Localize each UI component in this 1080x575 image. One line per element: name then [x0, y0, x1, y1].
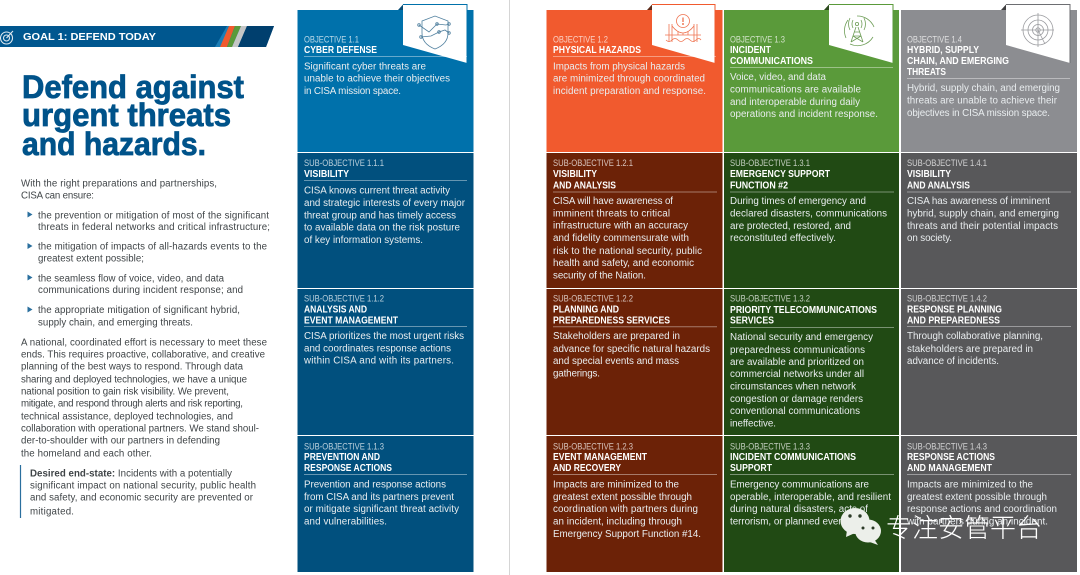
body paragraph: collaboration with operational partners. We stand shoul- — [21, 424, 259, 434]
panel: sub-objective 1.1.3: or mitigate significant threat activity — [304, 504, 459, 515]
panel: sub-objective 1.2.2: gatherings. — [553, 368, 600, 380]
panel: objective 1.4 hybrid threats: Hybrid, supply chain, and emerging — [907, 83, 1060, 94]
panel: objective 1.3 incident communications: operations and incident response. — [730, 109, 878, 120]
panel: sub-objective 1.3.3: operable, interoperable, and resilient — [730, 492, 891, 503]
panel: sub-objective 1.1.1: VISIBILITY — [304, 169, 349, 180]
panel: objective 1.1 cyber defense: OBJECTIVE 1.1 — [304, 34, 359, 44]
panel: sub-objective 1.2.3: EVENT MANAGEMENT — [553, 452, 647, 463]
panel: sub-objective 1.2.3: greatest extent possible through — [553, 492, 692, 503]
bullet list: supply chain, and emerging threats. — [38, 318, 193, 328]
panel: sub-objective 1.2.3: SUB-OBJECTIVE 1.2.3 — [553, 442, 633, 452]
panel: sub-objective 1.4.1: VISIBILITY — [907, 169, 951, 180]
panel: sub-objective 1.2.1: health and safety, and economic — [553, 258, 694, 269]
panel: objective 1.4 hybrid threats — [901, 4, 1077, 152]
panel: sub-objective 1.2.3: Emergency Support Function #14. — [553, 529, 701, 540]
panel: sub-objective 1.4.2: RESPONSE PLANNING — [907, 304, 1002, 316]
panel: sub-objective 1.2.2: and special events and mass — [553, 356, 679, 367]
panel: sub-objective 1.2.3 — [546, 436, 722, 572]
panel: sub-objective 1.2.1 — [546, 153, 722, 288]
bullet list: communications during incident response; and — [38, 285, 243, 296]
panel: sub-objective 1.1.3: Prevention and response actions — [304, 480, 446, 490]
panel: sub-objective 1.4.1: threats and their potential impacts — [907, 221, 1058, 232]
panel: sub-objective 1.4.2 — [901, 289, 1077, 435]
panel: sub-objective 1.2.2 — [546, 289, 722, 435]
panel: sub-objective 1.1.3: and vulnerabilities. — [304, 516, 387, 528]
panel: objective 1.4 hybrid threats: threats are unable to achieve their — [907, 96, 1058, 106]
bullet list: the mitigation of impacts of all-hazards events to the — [38, 242, 267, 252]
panel: sub-objective 1.3.3: terrorism, or planned events. — [730, 516, 854, 528]
body paragraph: der-to-shoulder with our partners in defending — [21, 436, 220, 446]
panel: sub-objective 1.3.2: ineffective. — [730, 418, 776, 430]
panel: objective 1.4 hybrid threats: objectives in CISA mission space. — [907, 108, 1050, 119]
panel: sub-objective 1.3.1 — [724, 153, 899, 288]
panel: sub-objective 1.1.1: and strategic interests of every major — [304, 198, 466, 209]
desired end-state callout: mitigated. — [30, 506, 74, 518]
panel: sub-objective 1.1.3: from CISA and its partners prevent — [304, 492, 454, 503]
panel: sub-objective 1.3.3: during natural disasters, acts of — [730, 504, 868, 515]
body paragraph — [21, 338, 267, 460]
panel: objective 1.2 physical hazards: incident preparation and response. — [553, 86, 706, 97]
panel: objective 1.1 cyber defense: unable to achieve their objectives — [304, 74, 450, 84]
body paragraph: the homeland and each other. — [21, 448, 152, 460]
panel: sub-objective 1.2.1: security of the Nation. — [553, 270, 646, 282]
panel: objective 1.3 incident communications: INCIDENT — [730, 45, 771, 56]
bullet list: the prevention or mitigation of most of the significant — [38, 210, 269, 222]
body paragraph: national position to gain risk visibility. We prevent, — [21, 386, 229, 398]
panel: sub-objective 1.4.1: AND ANALYSIS — [907, 180, 970, 191]
panel: sub-objective 1.3.1: EMERGENCY SUPPORT — [730, 169, 830, 180]
panel: sub-objective 1.1.1 — [298, 153, 474, 288]
panel: objective 1.4 hybrid threats: OBJECTIVE 1.4 — [907, 34, 962, 44]
panel: sub-objective 1.4.3: RESPONSE ACTIONS — [907, 452, 995, 463]
panel: sub-objective 1.2.1: SUB-OBJECTIVE 1.2.1 — [553, 158, 633, 168]
panel: sub-objective 1.4.3: greatest extent possible through — [907, 492, 1047, 503]
title — [22, 69, 244, 162]
desired end-state callout: significant impact on national security, public health — [30, 480, 256, 492]
panel: sub-objective 1.1.3: PREVENTION AND — [304, 452, 380, 463]
panel: sub-objective 1.4.1: hybrid, supply chain, and emerging — [907, 208, 1059, 220]
panel: sub-objective 1.1.2: CISA prioritizes the most urgent risks — [304, 331, 464, 342]
panel: sub-objective 1.1.3: RESPONSE ACTIONS — [304, 463, 392, 474]
panel: sub-objective 1.3.2: circumstances when network — [730, 382, 856, 392]
body paragraph: technical assistance, deployed technologies, and — [21, 412, 233, 422]
desired end-state callout: and safety, and economic security are prevented or — [30, 492, 254, 504]
icon: radar — [1021, 13, 1054, 47]
panel: sub-objective 1.4.2: stakeholders are prepared in — [907, 344, 1033, 355]
panel: objective 1.3 incident communications: communications are available — [730, 84, 862, 96]
bullet list: threats in federal networks and critical infrastructure; — [38, 222, 270, 233]
panel: sub-objective 1.4.3: AND MANAGEMENT — [907, 463, 992, 474]
panel: objective 1.3 incident communications: COMMUNICATIONS — [730, 56, 813, 67]
panel: sub-objective 1.1.3: SUB-OBJECTIVE 1.1.3 — [304, 442, 384, 452]
panel: sub-objective 1.2.1: CISA will have awareness of — [553, 196, 673, 207]
panel: objective 1.1 cyber defense: CYBER DEFENSE — [304, 45, 377, 56]
icon: shield network — [418, 16, 450, 49]
panel: sub-objective 1.1.2: and coordinates response actions — [304, 344, 451, 354]
title: Defend against — [22, 69, 244, 105]
panel: sub-objective 1.2.1: infrastructure with an accuracy — [553, 220, 688, 232]
panel: sub-objective 1.3.1: declared disasters, communications — [730, 208, 887, 220]
icon: bridge hazard — [665, 14, 701, 42]
panel: sub-objective 1.4.3: SUB-OBJECTIVE 1.4.3 — [907, 442, 987, 452]
panel: sub-objective 1.3.1: During times of emergency and — [730, 196, 866, 207]
panel: objective 1.2 physical hazards: PHYSICAL HAZARDS — [553, 45, 641, 56]
body paragraph: sharing and deployed technologies, we have a unique — [21, 374, 247, 386]
panel: sub-objective 1.4.1: CISA has awareness of imminent — [907, 196, 1050, 207]
panel: sub-objective 1.3.3: SUB-OBJECTIVE 1.3.3 — [730, 442, 810, 452]
panel: sub-objective 1.3.2: are available and prioritized on — [730, 357, 864, 368]
panel: objective 1.2 physical hazards: OBJECTIVE 1.2 — [553, 34, 608, 44]
bullet list — [28, 210, 270, 328]
panel: sub-objective 1.1.2: ANALYSIS AND — [304, 304, 367, 316]
panel: sub-objective 1.3.3: SUPPORT — [730, 463, 772, 474]
panel: sub-objective 1.3.2: PRIORITY TELECOMMUNICATIONS — [730, 305, 877, 316]
panel: sub-objective 1.2.2: PREPAREDNESS SERVICES — [553, 316, 670, 326]
panel: sub-objective 1.3.1: SUB-OBJECTIVE 1.3.1 — [730, 158, 810, 168]
panel: objective 1.1 cyber defense — [298, 4, 474, 152]
panel: sub-objective 1.4.2: AND PREPAREDNESS — [907, 316, 1000, 326]
panel: sub-objective 1.2.1: VISIBILITY — [553, 169, 597, 180]
panel: objective 1.3 incident communications — [724, 4, 899, 152]
panel: sub-objective 1.3.3: INCIDENT COMMUNICATIONS — [730, 452, 856, 463]
panel: sub-objective 1.1.1: CISA knows current threat activity — [304, 186, 450, 196]
panel: sub-objective 1.4.3 — [901, 436, 1077, 572]
icon: target — [0, 31, 13, 44]
panel: objective 1.2 physical hazards: are minimized through coordinated — [553, 74, 705, 84]
intro text — [21, 178, 217, 202]
panel: objective 1.4 hybrid threats: HYBRID, SUPPLY — [907, 45, 979, 56]
panel: objective 1.3 incident communications: and interoperable during daily — [730, 97, 860, 108]
icon: radio tower — [844, 16, 874, 46]
panel: sub-objective 1.4.3: Impacts are minimized to the — [907, 480, 1034, 490]
panel: sub-objective 1.2.1: imminent threats to critical — [553, 208, 670, 220]
panel: sub-objective 1.1.1: SUB-OBJECTIVE 1.1.1 — [304, 158, 384, 168]
desired end-state callout — [20, 465, 256, 518]
panel: objective 1.2 physical hazards — [546, 4, 722, 152]
panel: sub-objective 1.1.2: SUB-OBJECTIVE 1.1.2 — [304, 294, 384, 304]
panel: sub-objective 1.1.1: of key information systems. — [304, 235, 423, 246]
panel: sub-objective 1.3.2 — [724, 289, 899, 435]
goal banner — [0, 26, 274, 47]
panel: sub-objective 1.2.1: AND ANALYSIS — [553, 180, 616, 191]
panel: sub-objective 1.2.2: SUB-OBJECTIVE 1.2.2 — [553, 294, 633, 304]
panel: objective 1.3 incident communications: Voice, video, and data — [730, 72, 827, 83]
panel: sub-objective 1.2.3: Impacts are minimized to the — [553, 480, 680, 490]
panel: sub-objective 1.1.2: EVENT MANAGEMENT — [304, 316, 398, 326]
title: urgent threats — [22, 97, 231, 133]
panel: sub-objective 1.2.1: risk to the national security, public — [553, 246, 702, 257]
title: and hazards. — [22, 126, 206, 162]
panel: sub-objective 1.2.2: advance for specific natural hazards — [553, 344, 710, 355]
panel: sub-objective 1.1.3 — [298, 436, 474, 572]
panel: sub-objective 1.3.2: conventional communications — [730, 406, 860, 417]
panel: sub-objective 1.4.1: SUB-OBJECTIVE 1.4.1 — [907, 158, 987, 168]
panel: sub-objective 1.3.3 — [724, 436, 899, 572]
intro text: CISA can ensure: — [21, 190, 94, 202]
panel: sub-objective 1.3.2: commercial networks under all — [730, 369, 864, 380]
panel: sub-objective 1.3.2: SERVICES — [730, 316, 774, 326]
body paragraph: mitigate, and respond through alerts and risk reporting, — [21, 398, 243, 410]
panel: objective 1.4 hybrid threats: CHAIN, AND EMERGING — [907, 56, 1009, 67]
panel: objective 1.2 physical hazards: Impacts from physical hazards — [553, 62, 685, 72]
panel: sub-objective 1.4.2: Through collaborative planning, — [907, 331, 1043, 342]
panel: sub-objective 1.2.2: PLANNING AND — [553, 304, 619, 316]
panel: objective 1.4 hybrid threats: THREATS — [907, 67, 946, 78]
panel: sub-objective 1.3.1: reconstituted effectively. — [730, 233, 836, 244]
watermark: wechat logo and name: 专注安管平台 — [886, 508, 1042, 545]
panel: sub-objective 1.1.2 — [298, 289, 474, 435]
panel: sub-objective 1.2.3: an incident, including through — [553, 516, 682, 528]
bullet list: the appropriate mitigation of significant hybrid, — [38, 305, 240, 316]
intro text: With the right preparations and partnerships, — [21, 178, 217, 190]
body paragraph: ends. This requires proactive, collaborative, and creative — [21, 350, 265, 360]
desired end-state callout: Desired end-state: Incidents with a potentially — [30, 468, 232, 480]
panel: sub-objective 1.4.3: with partners during an incident. — [906, 516, 1048, 528]
panel: sub-objective 1.2.3: coordination with partners during — [553, 504, 698, 515]
panel: objective 1.3 incident communications: OBJECTIVE 1.3 — [730, 34, 785, 44]
panel: sub-objective 1.3.2: SUB-OBJECTIVE 1.3.2 — [730, 294, 810, 304]
panel: sub-objective 1.3.1: are protected, restored, and — [730, 221, 851, 232]
panel: sub-objective 1.2.2: Stakeholders are prepared in — [553, 331, 680, 342]
panel: sub-objective 1.1.1: to available data on the risk posture — [304, 222, 461, 234]
panel: sub-objective 1.3.1: FUNCTION #2 — [730, 180, 788, 191]
panel: sub-objective 1.3.2: National security and emergency — [730, 332, 873, 343]
panel: sub-objective 1.1.2: within CISA and with its partners. — [303, 356, 454, 366]
panel: sub-objective 1.3.2: congestion or damage renders — [730, 394, 863, 405]
panel: sub-objective 1.4.1 — [901, 153, 1077, 288]
panel: sub-objective 1.4.3: response actions and coordination — [907, 504, 1057, 515]
body paragraph: A national, coordinated effort is necessary to meet these — [21, 338, 267, 348]
goal banner: GOAL 1: DEFEND TODAY — [23, 32, 156, 43]
bullet list: greatest extent possible; — [38, 254, 144, 264]
bullet list: the seamless flow of voice, video, and data — [38, 274, 225, 284]
panel: sub-objective 1.4.2: SUB-OBJECTIVE 1.4.2 — [907, 294, 987, 304]
body paragraph: planning of the best ways to respond. Through data — [21, 362, 244, 372]
panel: sub-objective 1.4.1: on society. — [907, 233, 952, 244]
panel: sub-objective 1.2.3: AND RECOVERY — [553, 463, 621, 474]
panel: sub-objective 1.1.1: threat group and has timely access — [304, 210, 456, 222]
panel: objective 1.1 cyber defense: in CISA mission space. — [304, 86, 401, 97]
panel: sub-objective 1.3.2: preparedness communications — [730, 345, 865, 356]
panel: sub-objective 1.4.2: advance of incidents. — [907, 356, 999, 367]
panel: sub-objective 1.3.3: Emergency communications are — [730, 480, 870, 490]
panel: sub-objective 1.2.1: and fidelity commensurate with — [553, 233, 689, 244]
panel: objective 1.1 cyber defense: Significant cyber threats are — [304, 62, 427, 72]
